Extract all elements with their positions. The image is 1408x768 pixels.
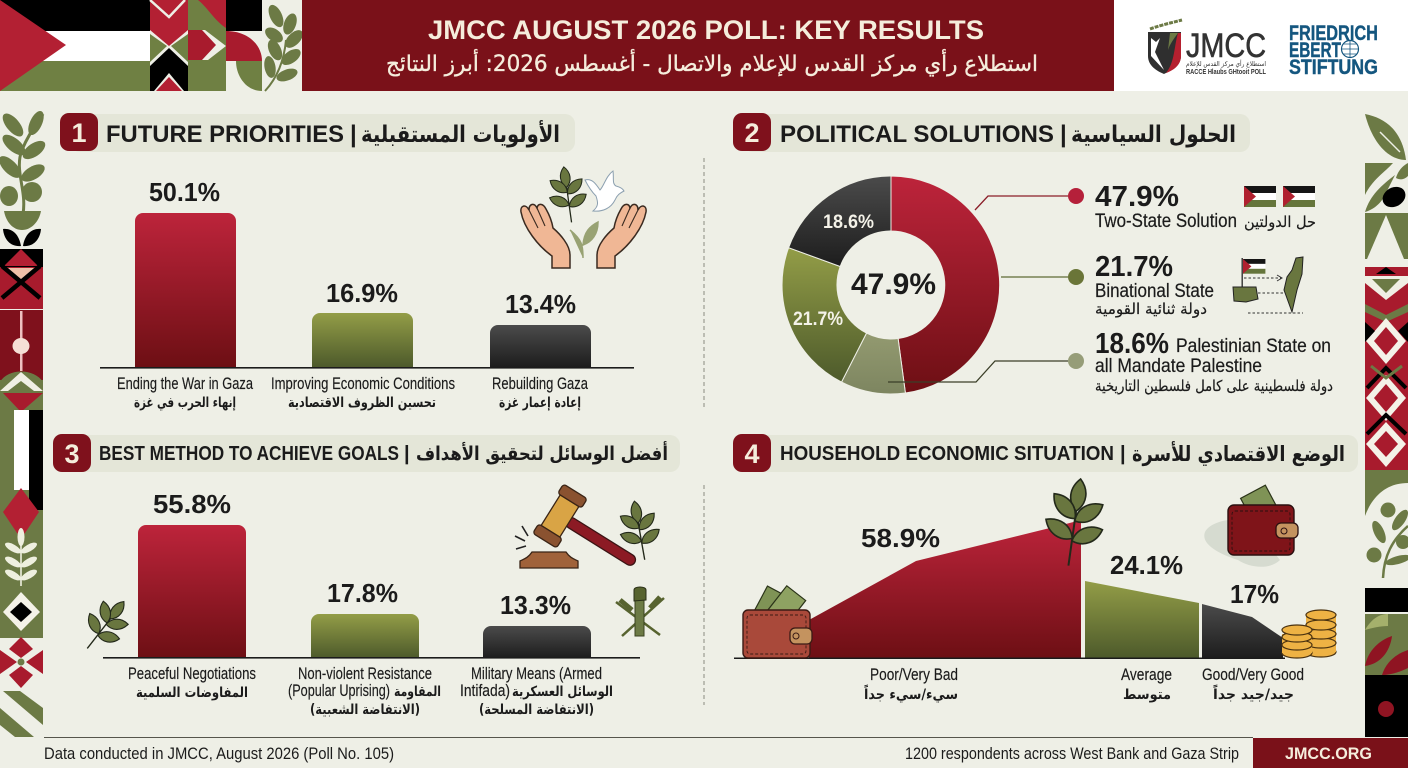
panel: best method	[53, 434, 680, 718]
JMCC logo: RACCE Hlaubs GHtooit POLL	[1186, 69, 1267, 76]
area chart	[734, 520, 1304, 703]
legend: two-state: Two-State Solution	[1095, 211, 1237, 232]
header olive sprig	[262, 3, 306, 91]
bar chart 3: (Popular Uprising)	[288, 681, 390, 700]
heading 1: 1	[71, 118, 87, 148]
heading 4: HOUSEHOLD ECONOMIC SITUATION	[780, 443, 1114, 465]
heading 1: FUTURE PRIORITIES	[106, 121, 344, 148]
heading 1	[60, 113, 575, 152]
bar chart 3: 13.3%	[500, 590, 571, 620]
heading 2: |	[1060, 121, 1067, 148]
FES logo: STIFTUNG	[1289, 56, 1378, 79]
icon: map and flag	[1233, 257, 1303, 313]
legend: two-state	[1068, 181, 1316, 232]
legend: two-state: حل الدولتين	[1244, 213, 1316, 231]
JMCC logo	[1148, 20, 1267, 76]
heading 3: |	[404, 443, 410, 465]
heading 3	[53, 434, 680, 472]
area chart: سيء/سيء جداً	[864, 684, 958, 703]
icon: flags	[1244, 186, 1315, 207]
footer	[44, 737, 1408, 768]
leader lines	[888, 196, 1068, 382]
legend: binational: دولة ثنائية القومية	[1095, 300, 1207, 318]
icon: gavel	[515, 484, 650, 587]
title Arabic: استطلاع رأي مركز القدس للإعلام والاتصال - أغسطس 2026: أبرز النتائج	[386, 49, 1038, 77]
heading 4: 4	[744, 439, 760, 469]
bar chart 3: الوسائل العسكرية	[512, 684, 613, 700]
area chart: 24.1%	[1110, 550, 1183, 580]
icon: olive branch	[1037, 474, 1113, 570]
icon: olive sprig left	[70, 588, 141, 662]
bar chart 3: (الانتفاضة الشعبية)	[310, 702, 420, 718]
icon: coins	[1282, 610, 1336, 658]
bar chart 1: 16.9%	[326, 278, 398, 308]
logo area	[1114, 0, 1408, 91]
heading 4	[733, 434, 1358, 472]
heading 3: أفضل الوسائل لتحقيق الأهداف	[416, 441, 668, 465]
icon: hands with dove and olive	[521, 164, 646, 268]
area chart: Poor/Very Bad	[870, 665, 958, 684]
bar chart 1: 13.4%	[505, 289, 576, 319]
panel: political solutions	[733, 113, 1333, 395]
icon: wallet left	[743, 586, 812, 658]
area chart: متوسط	[1123, 687, 1171, 703]
JMCC logo: استطلاع رأي مركز القدس للإعلام	[1186, 59, 1266, 68]
bar chart 1: إنهاء الحرب في غزة	[134, 395, 236, 411]
area chart: Good/Very Good	[1202, 665, 1304, 684]
header title banner	[302, 0, 1114, 91]
legend: binational: Binational State	[1095, 281, 1214, 302]
area chart: Average	[1121, 665, 1172, 684]
legend: mandate palestine: 18.6%	[1095, 328, 1169, 360]
legend: mandate palestine: Palestinian State on	[1176, 336, 1331, 357]
heading 1: الأولويات المستقبلية	[361, 119, 560, 148]
icon: olive sprig right	[613, 497, 666, 564]
bar chart 3: 55.8%	[153, 489, 231, 519]
left decorative strip	[0, 109, 48, 737]
bar chart 3: Peaceful Negotiations	[128, 664, 256, 683]
FES logo	[1289, 22, 1378, 79]
legend: mandate palestine: all Mandate Palestine	[1095, 356, 1262, 377]
heading 3: 3	[64, 439, 80, 469]
legend: binational: 21.7%	[1095, 251, 1173, 283]
legend: binational	[1068, 251, 1303, 318]
heading 1: |	[350, 121, 357, 148]
bar chart 3: المفاوضات السلمية	[136, 685, 248, 701]
donut chart: 21.7%	[793, 309, 843, 330]
FES logo: FRIEDRICH	[1289, 22, 1378, 45]
panel: household economic situation	[733, 434, 1358, 703]
heading 2	[733, 113, 1250, 152]
title English: JMCC AUGUST 2026 POLL: KEY RESULTS	[428, 15, 984, 45]
heading 2: الحلول السياسية	[1071, 122, 1236, 148]
legend: mandate palestine	[1068, 328, 1333, 395]
icon: wallet right	[1204, 485, 1298, 567]
footer source text: Data conducted in JMCC, August 2026 (Poll No. 105)	[44, 744, 394, 763]
legend: mandate palestine: دولة فلسطينية على كامل فلسطين التاريخية	[1095, 377, 1333, 395]
footer website: JMCC.ORG	[1285, 744, 1372, 763]
bar chart 1: 50.1%	[149, 177, 220, 207]
heading 2: POLITICAL SOLUTIONS	[780, 121, 1054, 148]
legend: two-state: 47.9%	[1095, 181, 1179, 213]
donut chart: 47.9%	[851, 268, 936, 301]
footer respondents text: 1200 respondents across West Bank and Gaza Strip	[905, 744, 1239, 763]
icon: fist and weapons	[616, 587, 664, 636]
JMCC logo: JMCC	[1186, 27, 1266, 65]
section divider dashes	[703, 158, 705, 705]
bar chart 1: Ending the War in Gaza	[117, 374, 253, 393]
panel: future priorities	[60, 113, 646, 411]
bar chart 3: (الانتفاضة المسلحة)	[479, 702, 594, 718]
bar chart 3	[103, 489, 640, 718]
bar chart 1: تحسين الظروف الاقتصادية	[288, 395, 436, 411]
bar chart 3: 17.8%	[327, 578, 398, 608]
area chart: 58.9%	[861, 523, 940, 553]
heading 4: الوضع الاقتصادي للأسرة	[1132, 440, 1345, 467]
bar chart 1: Improving Economic Conditions	[271, 374, 455, 393]
donut chart: 18.6%	[823, 212, 874, 233]
header decorative pattern	[0, 0, 306, 91]
bar chart 3: Non-violent Resistance	[298, 664, 432, 683]
bar chart 3: المقاومة	[394, 684, 441, 700]
FES logo: EBERT	[1289, 39, 1341, 62]
bar chart 3: Military Means (Armed	[471, 664, 602, 683]
bar chart 1: إعادة إعمار غزة	[499, 395, 581, 411]
bar chart 3: Intifada)	[460, 681, 510, 700]
heading 4: |	[1120, 443, 1126, 465]
heading 2: 2	[744, 118, 760, 148]
right decorative strip	[1365, 114, 1408, 737]
area chart: جيد/جيد جداً	[1213, 684, 1294, 703]
heading 3: BEST METHOD TO ACHIEVE GOALS	[99, 443, 399, 465]
bar chart 1: Rebuilding Gaza	[492, 374, 588, 393]
area chart: 17%	[1230, 579, 1279, 609]
bar chart 1	[100, 177, 634, 411]
donut chart	[782, 176, 1000, 394]
